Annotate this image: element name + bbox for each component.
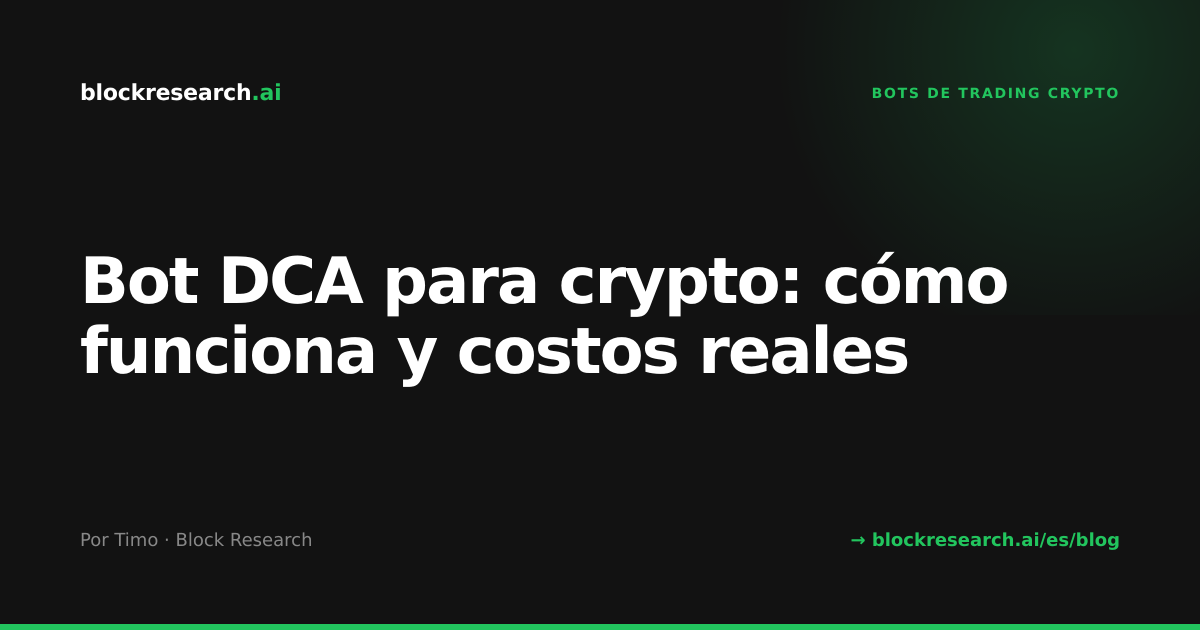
background glow <box>780 0 1200 315</box>
author line: Por Timo · Block Research <box>80 530 312 551</box>
title: funciona y costos reales <box>80 315 908 389</box>
category label: BOTS DE TRADING CRYPTO <box>872 86 1120 102</box>
title: Bot DCA para crypto: cómo <box>80 245 1008 319</box>
brand logo: blockresearch.ai <box>80 81 282 106</box>
bottom accent bar <box>0 624 1200 630</box>
blog link: → blockresearch.ai/es/blog <box>851 530 1120 551</box>
title <box>80 245 1008 389</box>
